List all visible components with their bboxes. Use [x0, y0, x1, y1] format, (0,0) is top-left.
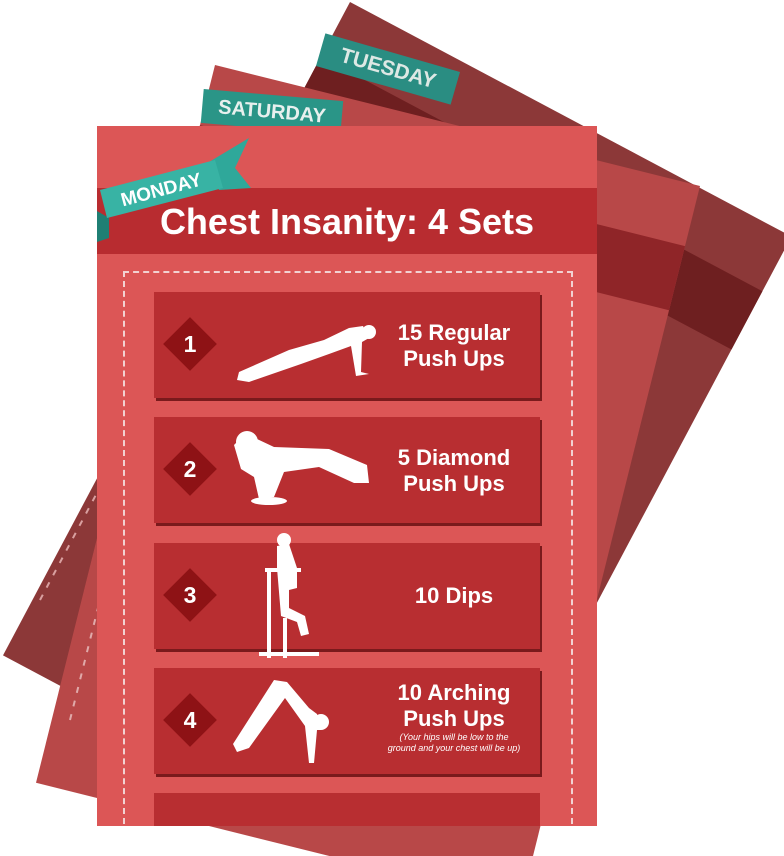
row 3: 10 Dips [415, 583, 493, 608]
row 4: ground and your chest will be up) [388, 743, 520, 753]
row 2 [154, 417, 540, 523]
row 1: 15 Regular [398, 320, 510, 345]
icon: push up [237, 325, 376, 382]
ribbon: saturday [201, 89, 343, 135]
header band [97, 188, 597, 254]
row 4: 4 [184, 707, 196, 733]
row 2: Push Ups [403, 471, 505, 496]
icon: dips [259, 533, 319, 658]
main card: monday [97, 126, 597, 826]
row 1 [154, 292, 540, 398]
ribbon: tuesday: TUESDAY [338, 44, 439, 93]
row 2: 5 Diamond [398, 445, 510, 470]
row 3: 3 [184, 582, 196, 608]
ribbon: monday: MONDAY [119, 170, 204, 211]
ribbon: tuesday [316, 33, 460, 105]
dashed frame [123, 271, 573, 824]
icon: diamond push up [234, 431, 369, 505]
ribbon: monday [97, 138, 251, 242]
row 5 [154, 793, 540, 826]
row 4: (Your hips will be low to the [399, 732, 509, 742]
row 3 [154, 543, 540, 649]
row 2: 2 [184, 456, 196, 482]
row 1: Push Ups [403, 346, 505, 371]
row 4: Push Ups [403, 706, 505, 731]
row 1: 1 [184, 331, 196, 357]
card: saturday [36, 65, 700, 856]
row 4: 10 Arching [398, 680, 510, 705]
title: Chest Insanity: 4 Sets [160, 201, 534, 242]
row 4 [154, 668, 540, 774]
icon: arching push up [233, 680, 329, 763]
ribbon: saturday: SATURDAY [217, 96, 327, 128]
